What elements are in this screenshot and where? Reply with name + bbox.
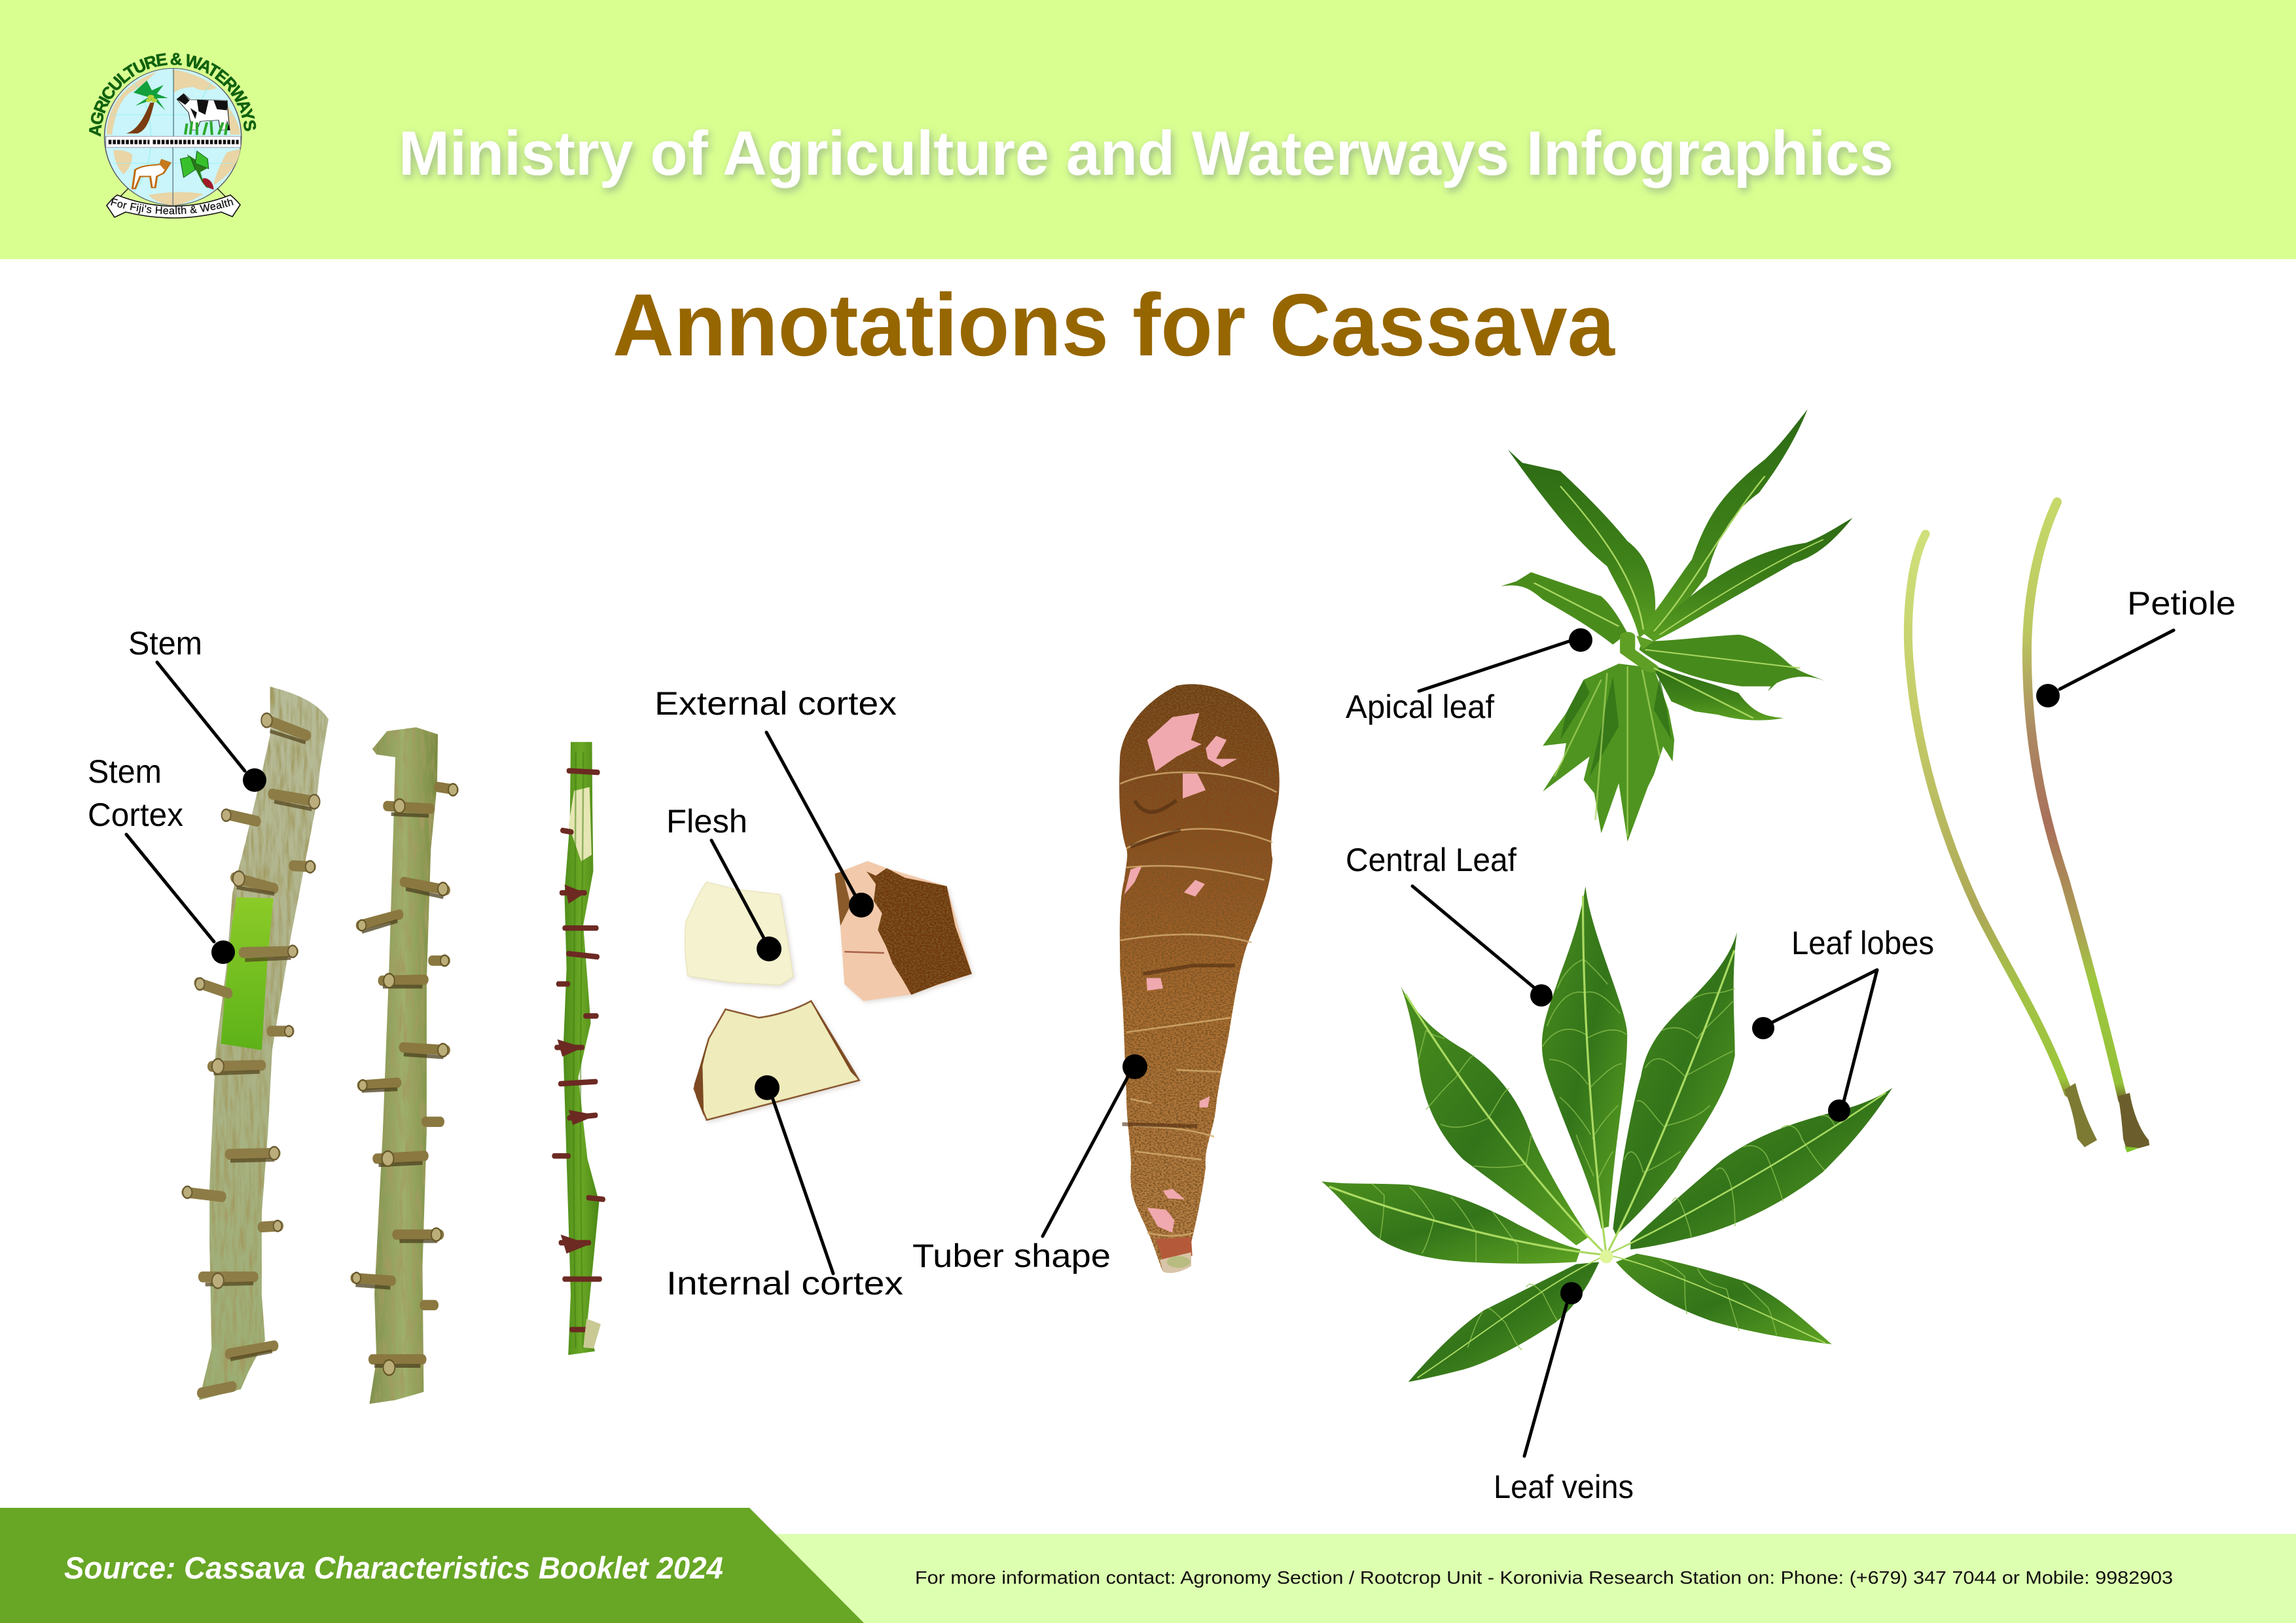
label: Petiole: Petiole	[2127, 585, 2236, 622]
label: External cortex: External cortex	[655, 685, 897, 722]
label: Stem Cortex: Cortex	[88, 796, 183, 833]
label: Leaf lobes: Leaf lobes	[1791, 925, 1934, 961]
label: Stem Cortex	[88, 753, 235, 964]
label: Stem Cortex: Stem	[88, 753, 162, 790]
header title: Ministry of Agriculture and Waterways Infographics	[399, 118, 1893, 188]
label: Tuber shape	[912, 1054, 1147, 1274]
label: Stem: Stem	[128, 625, 202, 662]
label: Petiole	[2036, 585, 2236, 707]
tuber pieces group	[685, 861, 972, 1120]
stem 3	[554, 742, 603, 1355]
leaf midribs	[1330, 897, 1885, 1378]
logo taro	[180, 151, 213, 190]
label: Flesh: Flesh	[666, 803, 747, 840]
cassava tuber	[1119, 684, 1280, 1273]
label: Central Leaf	[1346, 842, 1552, 1007]
leaf side veins	[1372, 959, 1835, 1349]
label: Internal cortex	[666, 1075, 903, 1302]
label: External cortex	[655, 685, 897, 918]
label: Stem	[128, 625, 266, 792]
label: Apical leaf: Apical leaf	[1346, 688, 1494, 725]
right petiole	[2027, 502, 2149, 1152]
logo pattern band	[106, 136, 241, 147]
logo arc text: AGRICULTURE & WATERWAYS	[89, 52, 257, 137]
header band	[0, 0, 2296, 259]
logo ribbon	[106, 188, 241, 219]
label: Leaf lobes	[1752, 925, 1934, 1122]
ministry logo	[89, 52, 257, 219]
footer source banner	[0, 1508, 864, 1623]
label: Internal cortex: Internal cortex	[666, 1265, 903, 1302]
label: Tuber shape: Tuber shape	[912, 1238, 1111, 1274]
stem 1 with exposed cortex	[183, 687, 329, 1400]
internal cortex piece	[694, 1001, 859, 1120]
external cortex piece	[835, 861, 972, 1001]
logo ribbon: For Fiji's Health & Wealth	[111, 198, 234, 215]
label: Leaf veins: Leaf veins	[1494, 1469, 1634, 1505]
label: Apical leaf	[1346, 628, 1592, 725]
footer contact text: For more information contact: Agronomy Section / Rootcrop Unit - Koronivia Research Station on: Phone: (+679) 347 7044 or Mobile: 9982903	[915, 1567, 2173, 1588]
palmate central leaf	[1321, 886, 1892, 1382]
footer source text: Source: Cassava Characteristics Booklet 2024	[64, 1550, 723, 1585]
stem 2	[352, 727, 457, 1404]
flesh piece	[685, 882, 793, 985]
petioles	[1908, 502, 2149, 1152]
label: Leaf veins	[1494, 1282, 1634, 1505]
apical leaf cluster	[1501, 410, 1852, 842]
logo cow	[177, 94, 230, 135]
main heading: Annotations for Cassava	[613, 276, 1615, 374]
left petiole	[1908, 534, 2097, 1147]
footer contact band	[720, 1534, 2296, 1623]
logo globe	[105, 68, 242, 205]
label: Flesh	[666, 803, 781, 961]
stems group	[183, 687, 603, 1404]
logo sheep	[132, 159, 170, 188]
label: Central Leaf: Central Leaf	[1346, 842, 1516, 878]
logo palm	[126, 80, 168, 134]
